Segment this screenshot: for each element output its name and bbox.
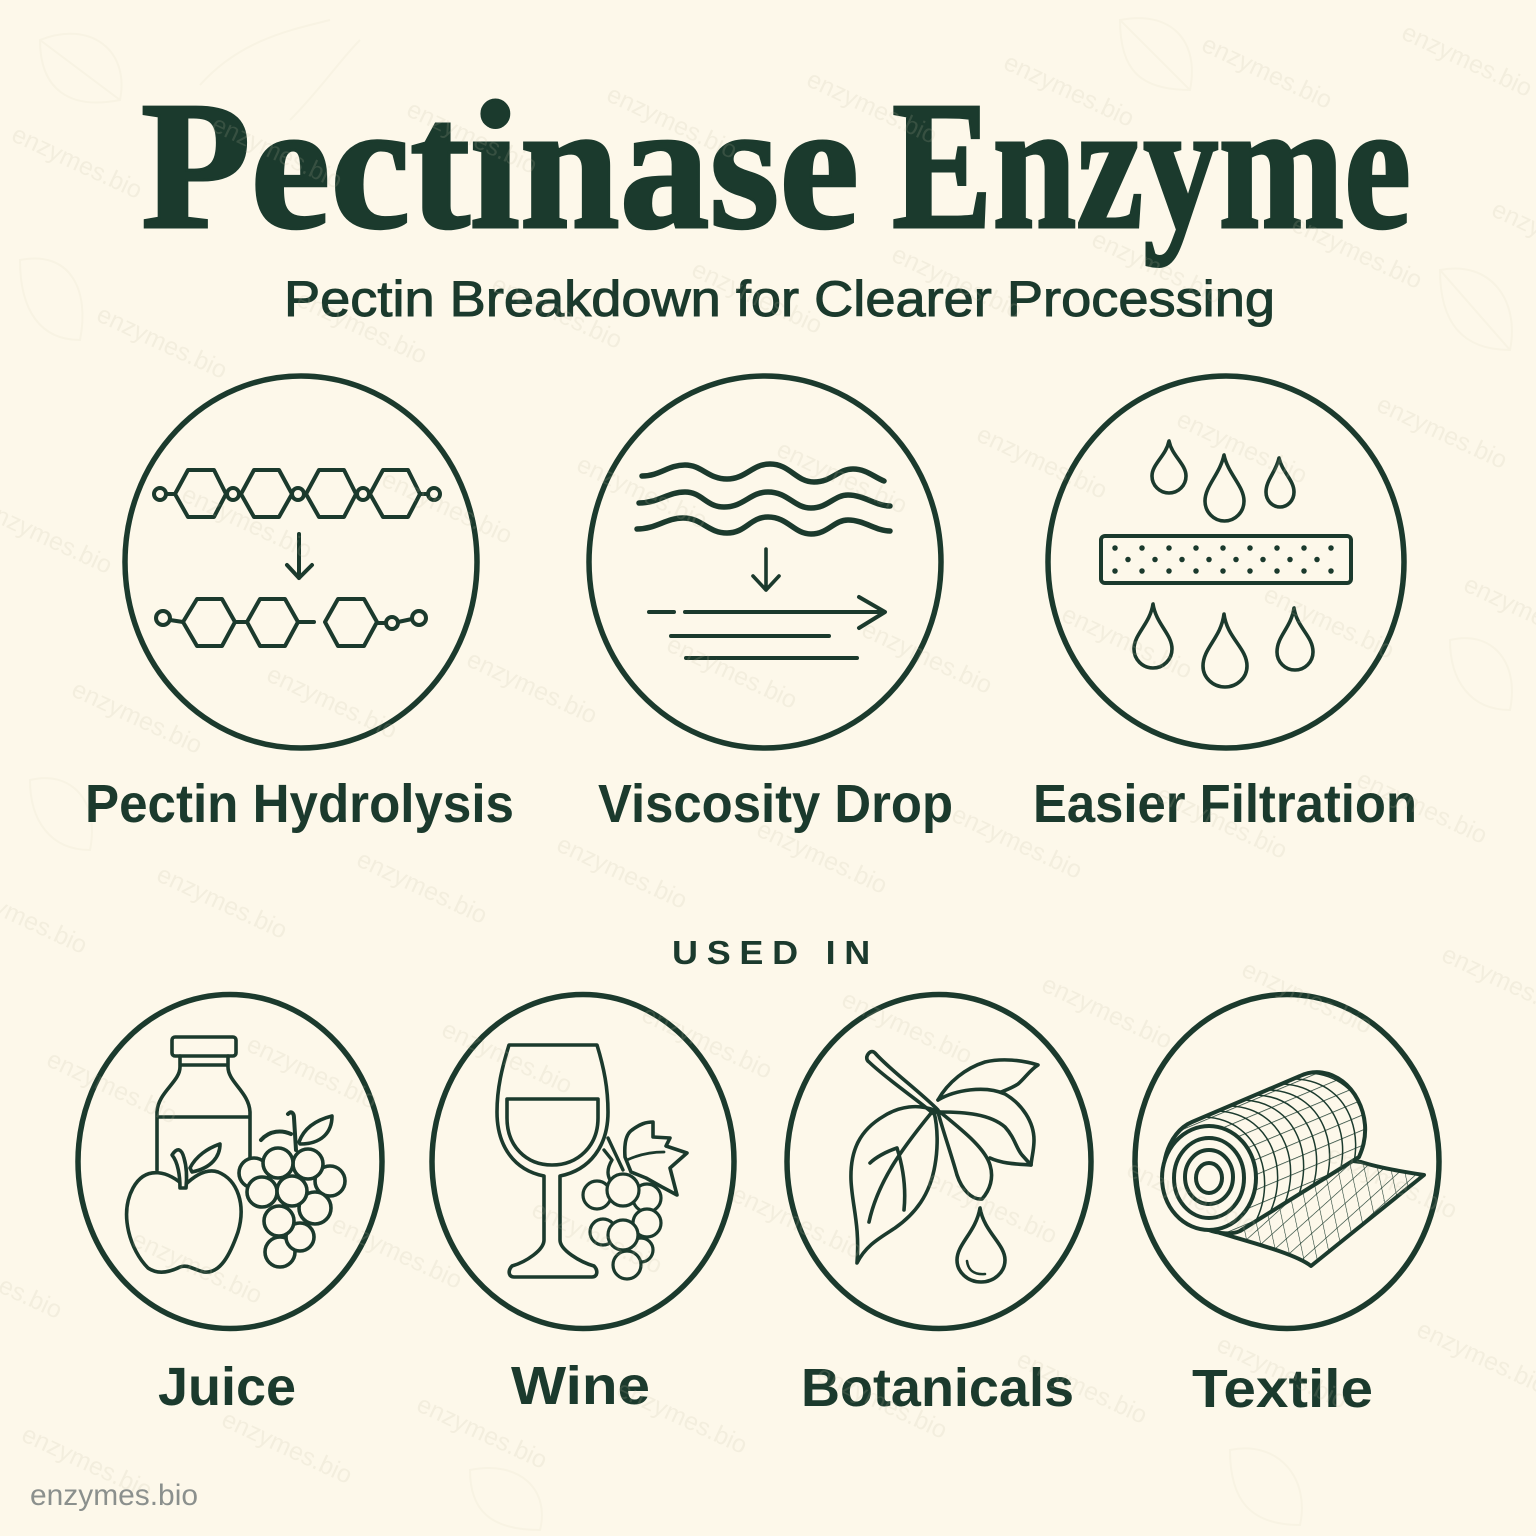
label: botanicals: Botanicals [801,1358,1074,1418]
watermark text pattern: enzymes.bio [1012,1345,1152,1430]
icon: drops above filter [1152,441,1294,521]
watermark text pattern: enzymes.bio [552,830,692,915]
watermark text pattern: enzymes.bio [662,630,802,715]
watermark text pattern: enzymes.bio [687,255,827,340]
icon: viscous waves [637,464,890,534]
watermark text pattern: enzymes.bio [612,1375,752,1460]
watermark text pattern: enzymes.bio [462,645,602,730]
icon: porous filter [1101,536,1351,583]
footer: source: enzymes.bio [30,1479,198,1512]
watermark text pattern: enzymes.bio [152,860,292,945]
watermark text pattern: enzymes.bio [242,1030,382,1115]
watermark text pattern: enzymes.bio [602,80,742,165]
watermark text pattern: enzymes.bio [1152,780,1292,865]
watermark text pattern: enzymes.bio [1287,210,1427,295]
watermark text pattern: enzymes.bio [527,1195,667,1280]
panel: pectin hydrolysis [125,376,477,748]
icon: leaves [851,1052,1038,1263]
icon: droplet [957,1208,1005,1282]
heading: used in: USED IN [672,934,879,971]
label: textile: Textile [1192,1359,1373,1419]
icon: intact pectin chain [154,470,440,517]
watermark text pattern: enzymes.bio [217,1405,357,1490]
title [141,64,1411,267]
panel: juice [78,994,382,1328]
watermark text pattern: enzymes.bio [772,435,912,520]
icon: flowing lines [649,597,885,658]
watermark text pattern: enzymes.bio [67,675,207,760]
watermark text pattern: enzymes.bio [17,1420,157,1505]
icon: wine glass [497,1045,608,1277]
watermark text pattern: enzymes.bio [1322,1140,1462,1225]
icon circle: viscosity drop [589,376,941,748]
panel: viscosity drop [589,376,941,748]
title: Pectinase [141,64,859,267]
icon: drops below filter [1134,604,1313,687]
watermark text pattern: enzymes.bio [292,285,432,370]
watermark text pattern: enzymes.bio [1172,405,1312,490]
title: Enzyme [892,64,1411,267]
watermark text pattern: enzymes.bio [402,95,542,180]
watermark text pattern: enzymes.bio [802,65,942,150]
panel: easier filtration [1048,376,1404,748]
watermark text pattern: enzymes.bio [352,845,492,930]
watermark text pattern: enzymes.bio [752,815,892,900]
label: easier filtration: Easier Filtration [1033,774,1417,834]
watermark text pattern: enzymes.bio [727,1180,867,1265]
watermark text pattern: enzymes.bio [377,465,517,550]
icon circle: juice [78,994,382,1328]
icon: grapes [239,1112,345,1267]
subtitle: Pectin Breakdown for Clearer Processing [284,271,1275,327]
watermark text pattern: enzymes.bio [1037,970,1177,1055]
watermark text pattern: enzymes.bio [487,270,627,355]
watermark text pattern: enzymes.bio [999,48,1139,133]
watermark text pattern: enzymes.bio [42,1045,182,1130]
icon circle: botanicals [787,994,1091,1328]
watermark text pattern: enzymes.bio [1057,600,1197,685]
panel: botanicals [787,994,1091,1328]
watermark text pattern: enzymes.bio [857,615,997,700]
watermark text pattern: enzymes.bio [92,300,232,385]
icon: apple [127,1144,241,1272]
label: viscosity drop: Viscosity Drop [598,774,953,834]
arrow: hydrolysis [287,534,312,578]
watermark text pattern: enzymes.bio [1372,390,1512,475]
icon circle: pectin hydrolysis [125,376,477,748]
watermark text pattern: enzymes.bio [1237,955,1377,1040]
watermark text pattern: enzymes.bio [7,120,147,205]
icon: grapes [583,1174,661,1279]
watermark text pattern: enzymes.bio [327,1210,467,1295]
watermark text pattern: enzymes.bio [127,1225,267,1310]
watermark text pattern: enzymes.bio [437,1015,577,1100]
panel: wine [432,994,734,1328]
watermark text pattern: enzymes.bio [572,450,712,535]
label: wine: Wine [511,1356,650,1416]
icon: fabric sheet [1220,1160,1424,1266]
watermark text pattern: enzymes.bio [947,800,1087,885]
panel: textile [1135,994,1439,1328]
watermark text pattern: enzymes.bio [637,1000,777,1085]
icon circle: easier filtration [1048,376,1404,748]
watermark text pattern: enzymes.bio [177,480,317,565]
watermark text pattern: enzymes.bio [412,1390,552,1475]
watermark text pattern: enzymes.bio [1397,18,1536,103]
icon circle: wine [432,994,734,1328]
watermark text pattern: enzymes.bio [837,985,977,1070]
watermark text pattern: enzymes.bio [1259,580,1399,665]
watermark text pattern: enzymes.bio [207,110,347,195]
watermark text pattern: enzymes.bio [1352,765,1492,850]
watermark text pattern: enzymes.bio [1087,225,1227,310]
icon: fabric roll [1162,1068,1382,1233]
label: pectin hydrolysis: Pectin Hydrolysis [85,774,514,834]
watermark text pattern: enzymes.bio [1122,1155,1262,1240]
icon: cleaved pectin chain [156,599,426,646]
label: juice: Juice [158,1357,296,1417]
icon: bottle [157,1037,250,1170]
watermark text pattern: enzymes.bio [1212,1330,1352,1415]
watermark text pattern: enzymes.bio [1197,30,1337,115]
arrow: viscosity decrease [753,549,779,590]
watermark text pattern: enzymes.bio [812,1360,952,1445]
icon: vine leaf [604,1122,687,1195]
icon circle: textile [1135,994,1439,1328]
watermark text pattern: enzymes.bio [922,1165,1062,1250]
watermark text pattern: enzymes.bio [887,240,1027,325]
watermark text pattern: enzymes.bio [262,660,402,745]
watermark text pattern: enzymes.bio [972,420,1112,505]
